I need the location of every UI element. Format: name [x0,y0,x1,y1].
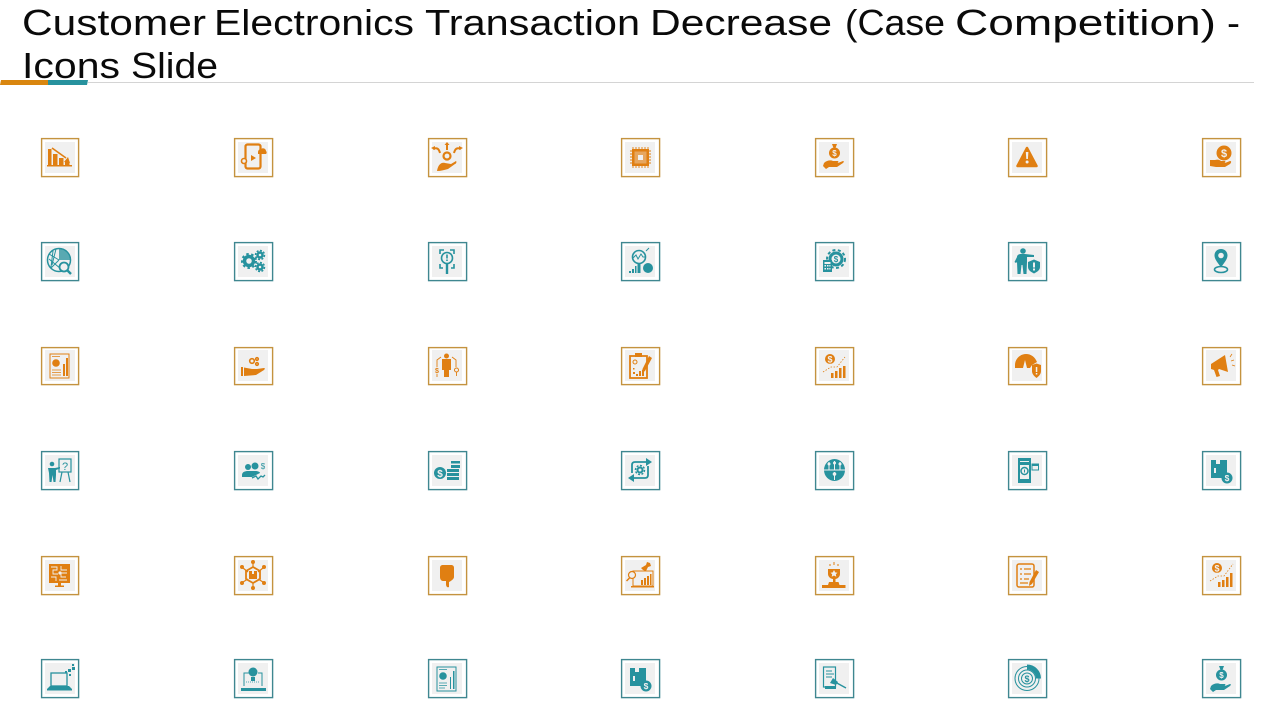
icon: document with gavel [816,660,854,698]
icon: gears [235,243,273,281]
icon: money bag in hand: $ [1219,671,1224,680]
icon: pie with magnifier [42,243,79,281]
icon: megaphone [1203,348,1241,385]
icon: gear in loop arrows [622,452,660,490]
icon: dollar coin and stacked coins: $ [437,469,443,480]
icon: box with dollar [1203,452,1241,490]
icon: hand holding gears [235,348,273,385]
icon: calculator and dollar gear: $ [834,255,839,264]
icon: box with dollar: $ [644,681,649,691]
icon: thumbs down [429,557,467,595]
icon: money bag in hand [1203,660,1241,698]
title: Electronics [214,2,414,43]
icon: coin over hand: $ [1221,148,1227,160]
icon: report document [429,660,467,698]
icon: laptop with lightbulb [235,660,273,698]
icon: presenter with question board: ? [62,461,68,473]
icon: magnifier with alert [429,243,467,281]
icon: mobile with cloud [235,139,273,177]
title: (Case [845,2,945,43]
icon: dollar coin and growth bars [816,348,854,385]
icon: circular dollar target: $ [1024,674,1030,684]
icon: money bag in hand [816,139,854,177]
icon: warning triangle [1009,139,1047,177]
icon: box with dollar [622,660,660,698]
icon: money bag in hand: $ [832,149,837,158]
icon: calculator and dollar gear [816,243,854,281]
icon: coin over hand [1203,139,1241,177]
icon: laptop with pixels [42,660,79,698]
title: Decrease [650,2,832,43]
icon: hand with gear and arrows [429,139,467,177]
icon: magnifier wave with bars and pie [622,243,660,281]
title: Slide [131,45,218,86]
icon: people with handshake and dollar: $ [261,462,266,471]
icon: magnifier over chart [622,557,660,595]
icon: network hub with box [235,557,273,595]
icon: falling bar chart [42,139,79,177]
title: - [1227,2,1240,43]
icon: trophy on podium [816,557,854,595]
icon: gauge with shield alert [1009,348,1047,385]
icon: box with dollar: $ [1225,473,1230,483]
title: Transaction [425,2,640,43]
icon: person with shield [1009,243,1047,281]
icon: people in globe [816,452,854,490]
icon: dollar coin and growth bars: $ [827,354,833,364]
icon: dollar coin and stacked coins [429,452,467,490]
icon: monitor with maze [42,557,79,595]
icon: dollar coin and growth bars: $ [1214,564,1220,574]
icon: phone with box [1009,452,1047,490]
icon: person with choices: $ [435,368,439,375]
icon: presenter with question board [42,452,79,490]
icon: person with choices [429,348,467,385]
title: Customer [22,2,206,43]
icon: people with handshake and dollar [235,452,273,490]
icon: checklist with pen [1009,557,1047,595]
icon: microchip [622,139,660,177]
title [22,2,1240,86]
icon: dollar coin and growth bars [1203,557,1241,595]
icon: report document [42,348,79,385]
icon: circular dollar target [1009,660,1047,698]
title underline accent [0,80,1254,85]
title: Competition) [955,2,1216,43]
icon: location pin [1203,243,1241,281]
icon: clipboard with pencil [622,348,660,385]
title: Icons [22,45,120,86]
